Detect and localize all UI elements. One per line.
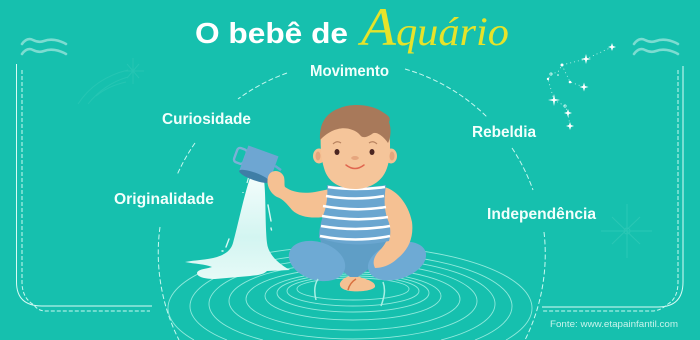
source credit: Fonte: www.etapainfantil.com: [550, 319, 678, 330]
left leg: [284, 234, 350, 288]
ripples: [168, 246, 532, 340]
title: O bebê de: [195, 18, 348, 50]
labels: [114, 63, 596, 223]
mouth: [346, 165, 364, 168]
dashed circle arcs: [158, 69, 545, 340]
constellation: [547, 43, 616, 130]
icon: aquarius waves right: [634, 39, 678, 54]
head: [321, 119, 390, 189]
left arm: [267, 171, 330, 218]
labels: Independência: [487, 206, 596, 223]
title: [195, 0, 509, 57]
shirt stripes: [320, 187, 390, 240]
labels: Curiosidade: [162, 111, 251, 128]
labels: Rebeldia: [472, 124, 536, 141]
hair: [320, 105, 391, 143]
eyes: [334, 149, 340, 155]
pants: [319, 235, 391, 277]
water stream: [185, 172, 290, 279]
right leg: [363, 235, 431, 287]
nose: [351, 156, 359, 160]
decorative frame: [16, 28, 683, 311]
right arm: [374, 186, 412, 268]
splashes: [315, 279, 384, 306]
cup: [229, 142, 285, 188]
labels: Originalidade: [114, 191, 214, 208]
icon: faint comet: [78, 58, 144, 104]
striped shirt: [319, 185, 390, 244]
ears: [313, 148, 325, 164]
eyebrows: [333, 142, 377, 144]
icon: aquarius waves left: [22, 39, 66, 54]
feet: [340, 276, 375, 291]
labels: Movimento: [310, 63, 389, 80]
baby: [267, 105, 431, 306]
icon: faint star: [601, 204, 652, 258]
